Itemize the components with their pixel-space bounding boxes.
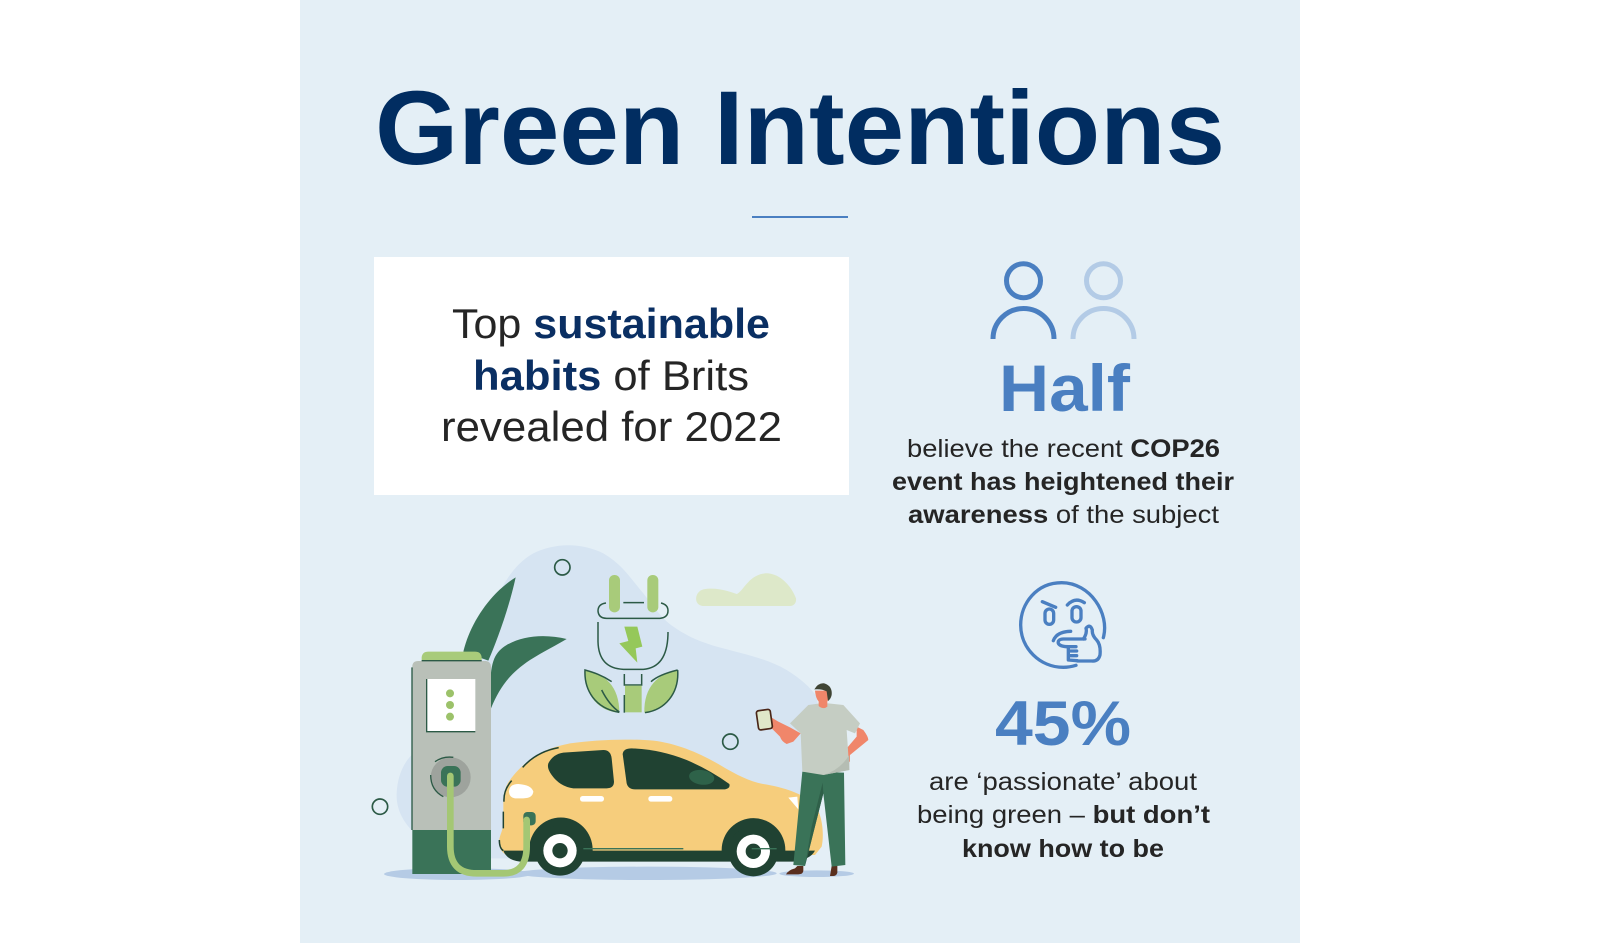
intro text: revealed for 2022	[441, 403, 782, 450]
small circles	[372, 560, 738, 814]
background panel	[300, 0, 1300, 943]
person with phone	[756, 683, 868, 876]
stat text: are ‘passionate’ about	[929, 768, 1197, 796]
intro text	[441, 300, 782, 450]
charging cable	[450, 776, 536, 873]
stat text	[892, 435, 1234, 529]
car	[499, 740, 823, 876]
intro text: habits of Brits	[473, 352, 749, 399]
cloud	[696, 573, 796, 606]
stat text	[917, 768, 1211, 863]
stat text: awareness of the subject	[908, 501, 1219, 529]
stat: half	[892, 264, 1234, 529]
illustration: EV charging	[372, 545, 868, 880]
stat: 45%	[917, 583, 1211, 863]
icon: thinking face	[1021, 583, 1105, 667]
stat text: being green – but don’t	[917, 801, 1211, 829]
icon: eco plug	[585, 575, 678, 713]
ground shadows	[384, 867, 854, 880]
panel: intro box	[374, 257, 849, 495]
leaves	[463, 577, 567, 708]
icon: two people	[993, 264, 1134, 339]
stat heading: Half	[999, 351, 1131, 425]
stat heading: 45%	[995, 689, 1131, 759]
intro text: Top sustainable	[452, 300, 770, 347]
stat text: event has heightened their	[892, 468, 1234, 496]
charging station	[412, 652, 491, 874]
stat text: know how to be	[962, 835, 1164, 863]
background blob	[397, 545, 830, 858]
stat text: believe the recent COP26	[907, 435, 1220, 463]
title: Green Intentions	[375, 70, 1225, 187]
